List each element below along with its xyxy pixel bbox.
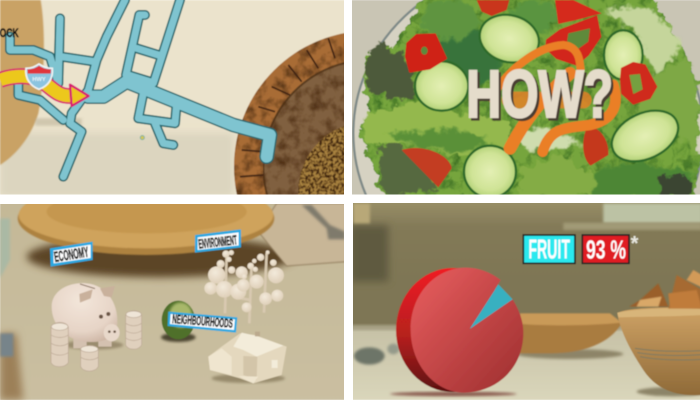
panel: road map on plate bbox=[0, 0, 344, 194]
blue road network bbox=[10, 0, 270, 177]
title: HOW? bbox=[468, 68, 614, 122]
label: Fruit bbox=[523, 234, 575, 265]
panel: fruit pie chart bbox=[350, 200, 700, 400]
plate shadow bbox=[27, 236, 293, 277]
plate bbox=[16, 204, 275, 256]
notebook bbox=[258, 203, 347, 266]
label: Neighbourhoods: NEIGHBOURHOODS bbox=[172, 312, 233, 331]
label: Neighbourhoods bbox=[168, 312, 237, 333]
asterisk: * bbox=[631, 233, 639, 255]
paper trees bbox=[204, 250, 284, 323]
wooden plate bbox=[517, 313, 623, 359]
tomatoes bbox=[402, 0, 608, 187]
title: HOW?: HOW? bbox=[466, 58, 613, 132]
highway shield bbox=[26, 64, 52, 89]
glass bbox=[0, 218, 10, 278]
label: 93 percent: 93 % bbox=[586, 235, 626, 265]
highway arrow bbox=[0, 76, 89, 106]
panel: salad with HOW? bbox=[352, 0, 700, 194]
title: HOW?: HOW? bbox=[469, 60, 615, 134]
label: Economy bbox=[50, 242, 93, 267]
piggy bank bbox=[52, 283, 123, 350]
panel: economy, environment, neighbourhoods: ENVIRONMENT bbox=[198, 232, 238, 252]
coin stacks bbox=[51, 311, 142, 371]
label: 93 percent bbox=[582, 235, 629, 265]
highway shield: HWY bbox=[32, 77, 46, 83]
bread bbox=[298, 126, 344, 194]
stones bbox=[354, 344, 399, 365]
pie wedge bbox=[469, 284, 513, 329]
fork bbox=[302, 205, 345, 239]
pie chart bbox=[390, 268, 523, 396]
paper house bbox=[208, 332, 287, 383]
label: Environment bbox=[195, 229, 241, 253]
left tan placemat bbox=[0, 0, 44, 165]
map label: OCK bbox=[0, 26, 19, 40]
label: Fruit: FRUIT bbox=[528, 234, 570, 265]
lettuce bbox=[358, 0, 698, 203]
bowl bbox=[617, 307, 700, 396]
brussels sprout bbox=[161, 301, 196, 342]
blurred jar bbox=[0, 333, 23, 400]
carrot ribbons bbox=[492, 45, 616, 152]
food in bowl bbox=[629, 270, 700, 308]
label: Economy: ECONOMY bbox=[53, 245, 90, 266]
cucumbers bbox=[415, 8, 686, 198]
map marker bbox=[140, 136, 144, 140]
plate rim bbox=[234, 32, 344, 194]
pie face bbox=[411, 268, 523, 393]
glass plate bbox=[352, 0, 700, 194]
panel: economy, environment, neighbourhoods bbox=[0, 204, 344, 400]
red peppers bbox=[406, 16, 657, 104]
